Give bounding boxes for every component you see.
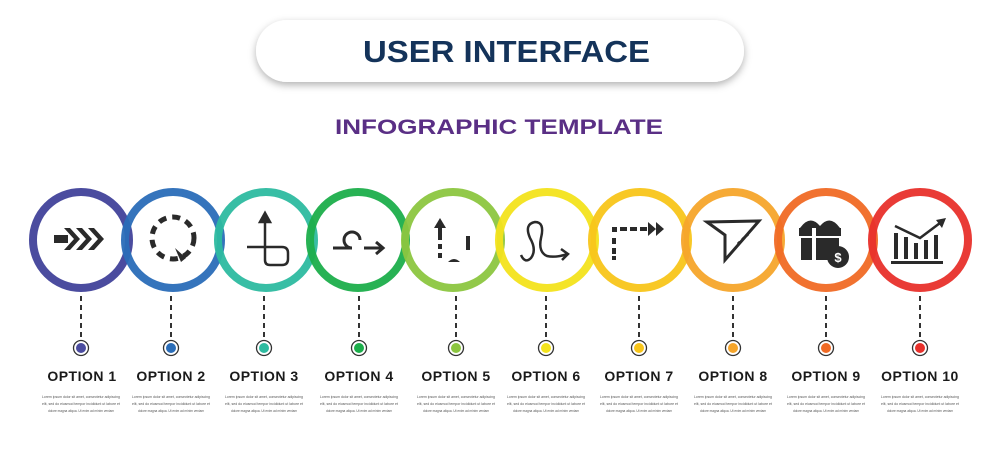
description texts: Lorem ipsum dolor sit amet, consectetur adipiscing <box>600 395 678 399</box>
description texts: Lorem ipsum dolor sit amet, consectetur adipiscing <box>320 395 398 399</box>
description texts: elit, sed do eiusmod tempor incididunt ut labore et <box>787 402 866 406</box>
icon: squiggle arrow <box>521 222 568 260</box>
icon: dashed corner arrow <box>612 222 664 260</box>
description texts: Lorem ipsum dolor sit amet, consectetur adipiscing <box>507 395 585 399</box>
icon: triple arrows <box>54 228 104 250</box>
description texts: Lorem ipsum dolor sit amet, consectetur adipiscing <box>787 395 865 399</box>
description texts: dolore magna aliqua. Ut enim ad minim veniam <box>793 409 859 413</box>
connector lines and markers <box>74 296 928 356</box>
description texts <box>42 395 960 413</box>
description texts: elit, sed do eiusmod tempor incididunt ut labore et <box>600 402 679 406</box>
icon: loop arrow <box>333 232 383 254</box>
icon: up arrow loop <box>247 213 288 265</box>
option labels: OPTION 7 <box>604 368 674 384</box>
option labels: OPTION 1 <box>47 368 117 384</box>
description texts: elit, sed do eiusmod tempor incididunt ut labore et <box>42 402 121 406</box>
description texts: elit, sed do eiusmod tempor incididunt ut labore et <box>507 402 586 406</box>
option labels: OPTION 3 <box>229 368 299 384</box>
description texts: dolore magna aliqua. Ut enim ad minim veniam <box>887 409 953 413</box>
description texts: elit, sed do eiusmod tempor incididunt ut labore et <box>225 402 304 406</box>
description texts: dolore magna aliqua. Ut enim ad minim veniam <box>326 409 392 413</box>
description texts: Lorem ipsum dolor sit amet, consectetur adipiscing <box>881 395 959 399</box>
option labels: OPTION 6 <box>511 368 581 384</box>
description texts: Lorem ipsum dolor sit amet, consectetur adipiscing <box>417 395 495 399</box>
description texts: elit, sed do eiusmod tempor incididunt ut labore et <box>132 402 211 406</box>
description texts: dolore magna aliqua. Ut enim ad minim veniam <box>513 409 579 413</box>
icon: circular dashed arrow <box>152 217 194 262</box>
icon: u-turn dashed arrow <box>434 218 470 262</box>
icon: paper plane <box>707 221 759 260</box>
description texts: elit, sed do eiusmod tempor incididunt ut labore et <box>881 402 960 406</box>
title pill <box>256 20 744 82</box>
option labels: OPTION 4 <box>324 368 394 384</box>
description texts: Lorem ipsum dolor sit amet, consectetur adipiscing <box>42 395 120 399</box>
description texts: dolore magna aliqua. Ut enim ad minim veniam <box>231 409 297 413</box>
description texts: elit, sed do eiusmod tempor incididunt ut labore et <box>320 402 399 406</box>
description texts: dolore magna aliqua. Ut enim ad minim veniam <box>423 409 489 413</box>
description texts: Lorem ipsum dolor sit amet, consectetur adipiscing <box>132 395 210 399</box>
title pill: USER INTERFACE <box>363 34 650 69</box>
icon: gift with dollar <box>799 220 849 268</box>
rings row <box>33 192 968 288</box>
description texts: dolore magna aliqua. Ut enim ad minim veniam <box>138 409 204 413</box>
option labels <box>47 368 959 384</box>
icon: gift with dollar: $ <box>834 250 842 265</box>
description texts: Lorem ipsum dolor sit amet, consectetur adipiscing <box>694 395 772 399</box>
description texts: elit, sed do eiusmod tempor incididunt ut labore et <box>417 402 496 406</box>
option labels: OPTION 2 <box>136 368 206 384</box>
description texts: elit, sed do eiusmod tempor incididunt ut labore et <box>694 402 773 406</box>
description texts: Lorem ipsum dolor sit amet, consectetur adipiscing <box>225 395 303 399</box>
description texts: dolore magna aliqua. Ut enim ad minim veniam <box>606 409 672 413</box>
description texts: dolore magna aliqua. Ut enim ad minim veniam <box>700 409 766 413</box>
option labels: OPTION 10 <box>881 368 959 384</box>
option labels: OPTION 9 <box>791 368 861 384</box>
subtitle: INFOGRAPHIC TEMPLATE <box>335 116 663 139</box>
icon: bar chart with trend arrow <box>891 218 946 264</box>
option labels: OPTION 8 <box>698 368 768 384</box>
description texts: dolore magna aliqua. Ut enim ad minim veniam <box>48 409 114 413</box>
option labels: OPTION 5 <box>421 368 491 384</box>
